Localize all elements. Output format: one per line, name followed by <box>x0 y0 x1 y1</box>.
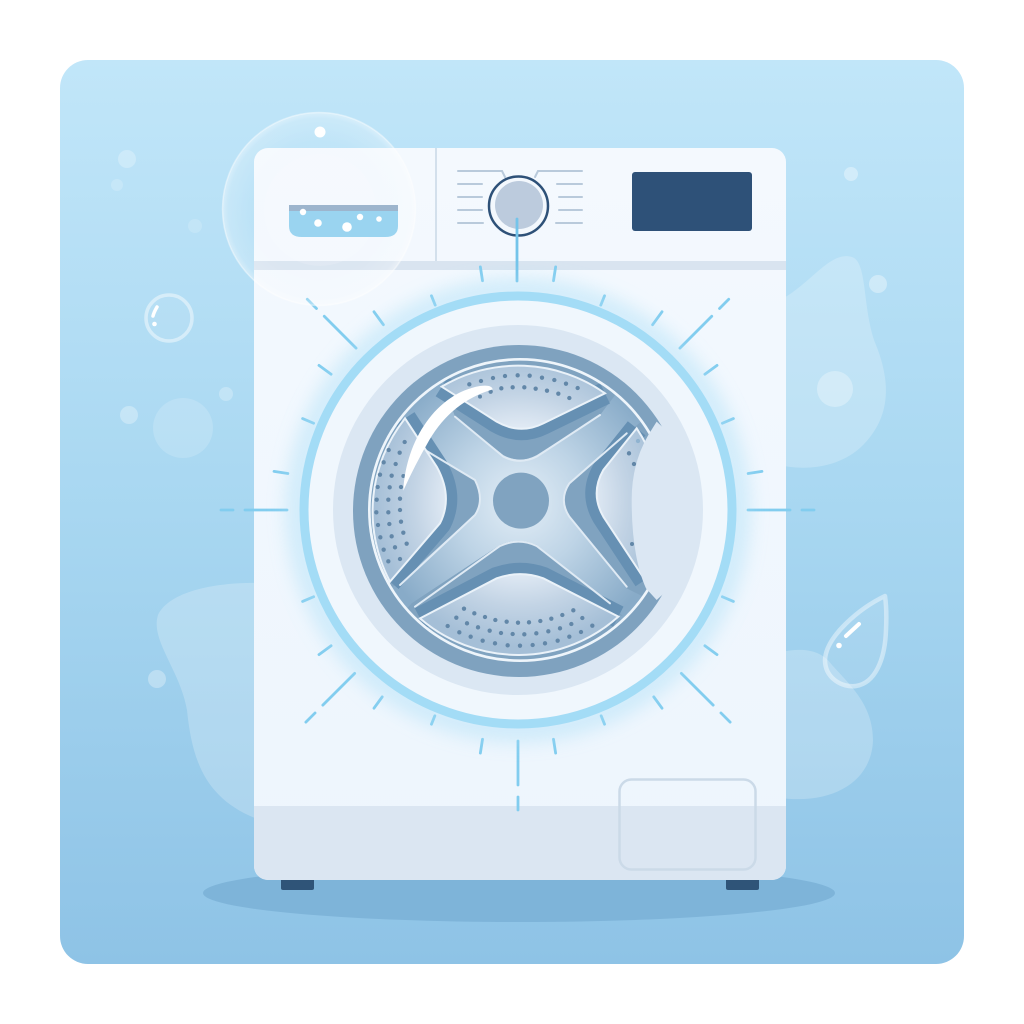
water drop <box>825 596 886 686</box>
band: left, mid blue <box>387 413 480 585</box>
drum outer ring <box>353 345 685 677</box>
floating background bubbles <box>111 150 887 688</box>
machine body <box>254 148 786 880</box>
door glow <box>298 290 738 730</box>
background panel <box>60 60 964 964</box>
radial ticks <box>221 219 814 810</box>
blob: lower right <box>780 650 873 799</box>
drum interior <box>360 359 690 661</box>
machine <box>254 148 786 880</box>
drum back plate <box>370 360 670 660</box>
door glass reflection <box>632 422 690 600</box>
dial knob <box>489 176 548 236</box>
drum inner rim <box>369 359 671 661</box>
perforation dots <box>374 373 640 648</box>
feet <box>281 878 759 890</box>
band: bottom, mid blue <box>450 544 536 578</box>
display screen <box>632 172 752 231</box>
bubble sparkle <box>314 126 326 138</box>
drum lobe: bottom <box>420 574 618 655</box>
base panel <box>254 806 786 880</box>
washing machine illustration <box>60 60 964 964</box>
detergent tray <box>289 205 398 237</box>
door <box>298 290 738 730</box>
glass highlight <box>403 386 493 491</box>
door outer ring <box>304 296 732 724</box>
service hatch <box>620 780 756 870</box>
soap bubble left <box>146 295 192 341</box>
large bubble <box>222 112 416 306</box>
blob: upper right <box>780 256 886 468</box>
dial labels <box>458 171 582 223</box>
band: right, mid blue <box>564 489 568 511</box>
detergent drawer bubble <box>222 112 416 306</box>
blob: lower left <box>157 583 260 820</box>
spider body <box>400 382 640 606</box>
inner bubble sheen <box>264 154 376 266</box>
door inner recess <box>333 325 703 695</box>
drum lobe: right <box>597 428 662 580</box>
spider body edge highlights <box>400 415 627 607</box>
control panel vertical divider <box>435 148 437 261</box>
background blobs <box>157 256 886 820</box>
band: top, mid blue <box>441 384 554 460</box>
control panel divider bar <box>254 261 786 270</box>
floor shadow <box>203 864 835 922</box>
drum lobe: top <box>442 366 605 429</box>
hub <box>493 473 549 529</box>
spider arm dark bands <box>387 383 648 618</box>
drum lobe: left <box>373 418 446 582</box>
